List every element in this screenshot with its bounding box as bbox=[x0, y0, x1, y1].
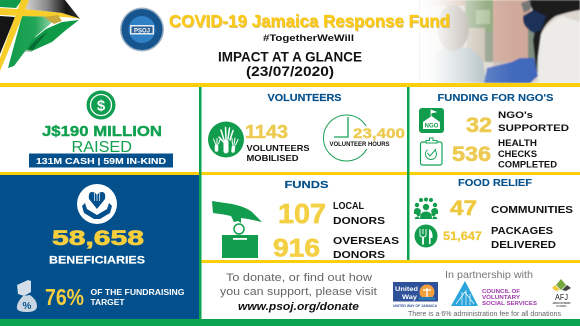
panel: food relief bbox=[414, 178, 573, 251]
hashtag: #TogetherWeWill bbox=[263, 33, 354, 44]
health checks label bbox=[498, 138, 558, 170]
beneficiaries count: 58,658 bbox=[52, 227, 144, 250]
beneficiaries label: BENEFICIARIES bbox=[49, 254, 145, 266]
raised label: RAISED bbox=[72, 139, 132, 156]
food relief heading: FOOD RELIEF bbox=[458, 178, 532, 189]
cash and in-kind bar bbox=[29, 154, 173, 168]
icon: fork and knife bbox=[414, 224, 438, 248]
packages label: PACKAGES bbox=[491, 226, 553, 237]
overseas donors label: DONORS bbox=[333, 249, 385, 261]
target label: OF THE FUNDRAISING bbox=[90, 288, 184, 297]
icon: Jamaican flag bbox=[0, 0, 80, 71]
communities label: COMMUNITIES bbox=[491, 205, 573, 216]
volunteers label: MOBILISED bbox=[246, 153, 298, 163]
overseas donors label: OVERSEAS bbox=[333, 235, 399, 247]
icon: NGO building: NGO bbox=[425, 124, 439, 130]
cash and in-kind bar: 131M CASH | 59M IN-KIND bbox=[36, 156, 166, 166]
local donors label bbox=[333, 200, 385, 227]
volunteers label bbox=[246, 143, 310, 163]
logo: United Way: United bbox=[395, 286, 418, 293]
icon: dollar coin bbox=[86, 90, 116, 120]
title: COVID-19 Jamaica Response Fund bbox=[170, 12, 451, 32]
panel: money raised bbox=[29, 90, 173, 168]
local donors label: DONORS bbox=[333, 215, 385, 227]
icon: community group bbox=[414, 198, 438, 219]
target label bbox=[90, 288, 184, 307]
target percentage: 76% bbox=[45, 284, 84, 310]
icon: NGO building bbox=[419, 108, 444, 133]
NGOs supported label bbox=[498, 110, 569, 134]
header photo bbox=[420, 0, 580, 83]
date: (23/07/2020) bbox=[246, 64, 334, 79]
logo: AFJ bbox=[552, 279, 571, 308]
icon: PSOJ seal bbox=[120, 8, 164, 52]
title: COVID-19 Jamaica Response Fund bbox=[169, 11, 450, 31]
packages label bbox=[491, 226, 556, 251]
logo: AFJ: AFJ bbox=[555, 292, 568, 302]
local donors count: 107 bbox=[278, 198, 326, 229]
donation call to action: www.psoj.org/donate bbox=[238, 301, 359, 313]
logo: Council of Voluntary Social Services: COUNCIL OF bbox=[482, 289, 520, 295]
donation call to action bbox=[220, 272, 377, 313]
logo: AFJ: AMERICAN FRIENDS bbox=[552, 302, 571, 305]
donation call to action: To donate, or find out how bbox=[226, 272, 372, 284]
panel: beneficiaries bbox=[0, 175, 199, 319]
icon: money bag with percent bbox=[17, 280, 37, 312]
icon: PSOJ seal: PSOJ bbox=[134, 28, 150, 34]
funding heading: FUNDING FOR NGO'S bbox=[438, 93, 554, 104]
divider lines bbox=[0, 83, 580, 319]
bottom band bbox=[0, 319, 580, 326]
volunteer hours count: 23,400 bbox=[353, 125, 405, 141]
panel: volunteers bbox=[208, 93, 405, 163]
health checks count: 536 bbox=[452, 143, 491, 166]
icon: clock ring bbox=[324, 115, 382, 161]
logo: Council of Voluntary Social Services: SOCIAL SERVICES bbox=[482, 301, 538, 307]
NGOs supported count: 32 bbox=[466, 114, 492, 137]
health checks label: HEALTH bbox=[498, 138, 537, 148]
packages label: DELIVERED bbox=[491, 240, 556, 251]
NGOs supported label: NGO's bbox=[498, 110, 533, 121]
panel: funds bbox=[212, 180, 399, 262]
subtitle: impact at a glance: IMPACT AT A GLANCE bbox=[218, 50, 362, 64]
icon: clipboard with stethoscope bbox=[420, 138, 442, 165]
partners heading: In partnership with bbox=[445, 269, 533, 281]
volunteers label: VOLUNTEERS bbox=[246, 143, 310, 153]
overseas donors label bbox=[333, 235, 399, 261]
health checks label: COMPLETED bbox=[498, 160, 558, 170]
icon: hand dropping coin in box bbox=[212, 201, 262, 258]
health checks label: CHECKS bbox=[498, 149, 537, 159]
NGOs supported label: SUPPORTED bbox=[498, 123, 569, 134]
icon: raised hands bbox=[208, 122, 244, 158]
logo: Council of Voluntary Social Services bbox=[451, 281, 538, 307]
logo: United Way bbox=[393, 282, 438, 308]
donation call to action: you can support, please visit bbox=[220, 286, 377, 298]
icon: dollar coin: $ bbox=[97, 98, 106, 114]
volunteers heading: VOLUNTEERS bbox=[268, 93, 342, 104]
packages count: 51,647 bbox=[443, 231, 482, 243]
administration fee note: There is a 6% administration fee for all donations bbox=[408, 311, 562, 318]
logo: United Way: Way bbox=[402, 294, 417, 301]
panel: funding for NGOs bbox=[419, 93, 569, 170]
icon: money bag with percent: % bbox=[23, 301, 32, 312]
icon: hands with heart bbox=[77, 184, 117, 224]
communities count: 47 bbox=[450, 197, 477, 220]
logo: AFJ: OF JAMAICA bbox=[556, 305, 567, 308]
overseas donors count: 916 bbox=[273, 234, 320, 262]
logo: Council of Voluntary Social Services: VOLUNTARY bbox=[482, 295, 521, 301]
volunteers count: 1143 bbox=[245, 122, 288, 142]
amount raised: J$190 MILLION bbox=[42, 123, 162, 140]
logo: United Way: UNITED WAY OF JAMAICA bbox=[393, 304, 437, 308]
funds heading: FUNDS bbox=[284, 180, 329, 191]
target label: TARGET bbox=[90, 298, 125, 307]
volunteer hours label: VOLUNTEER HOURS bbox=[330, 142, 390, 148]
local donors label: LOCAL bbox=[333, 200, 364, 212]
